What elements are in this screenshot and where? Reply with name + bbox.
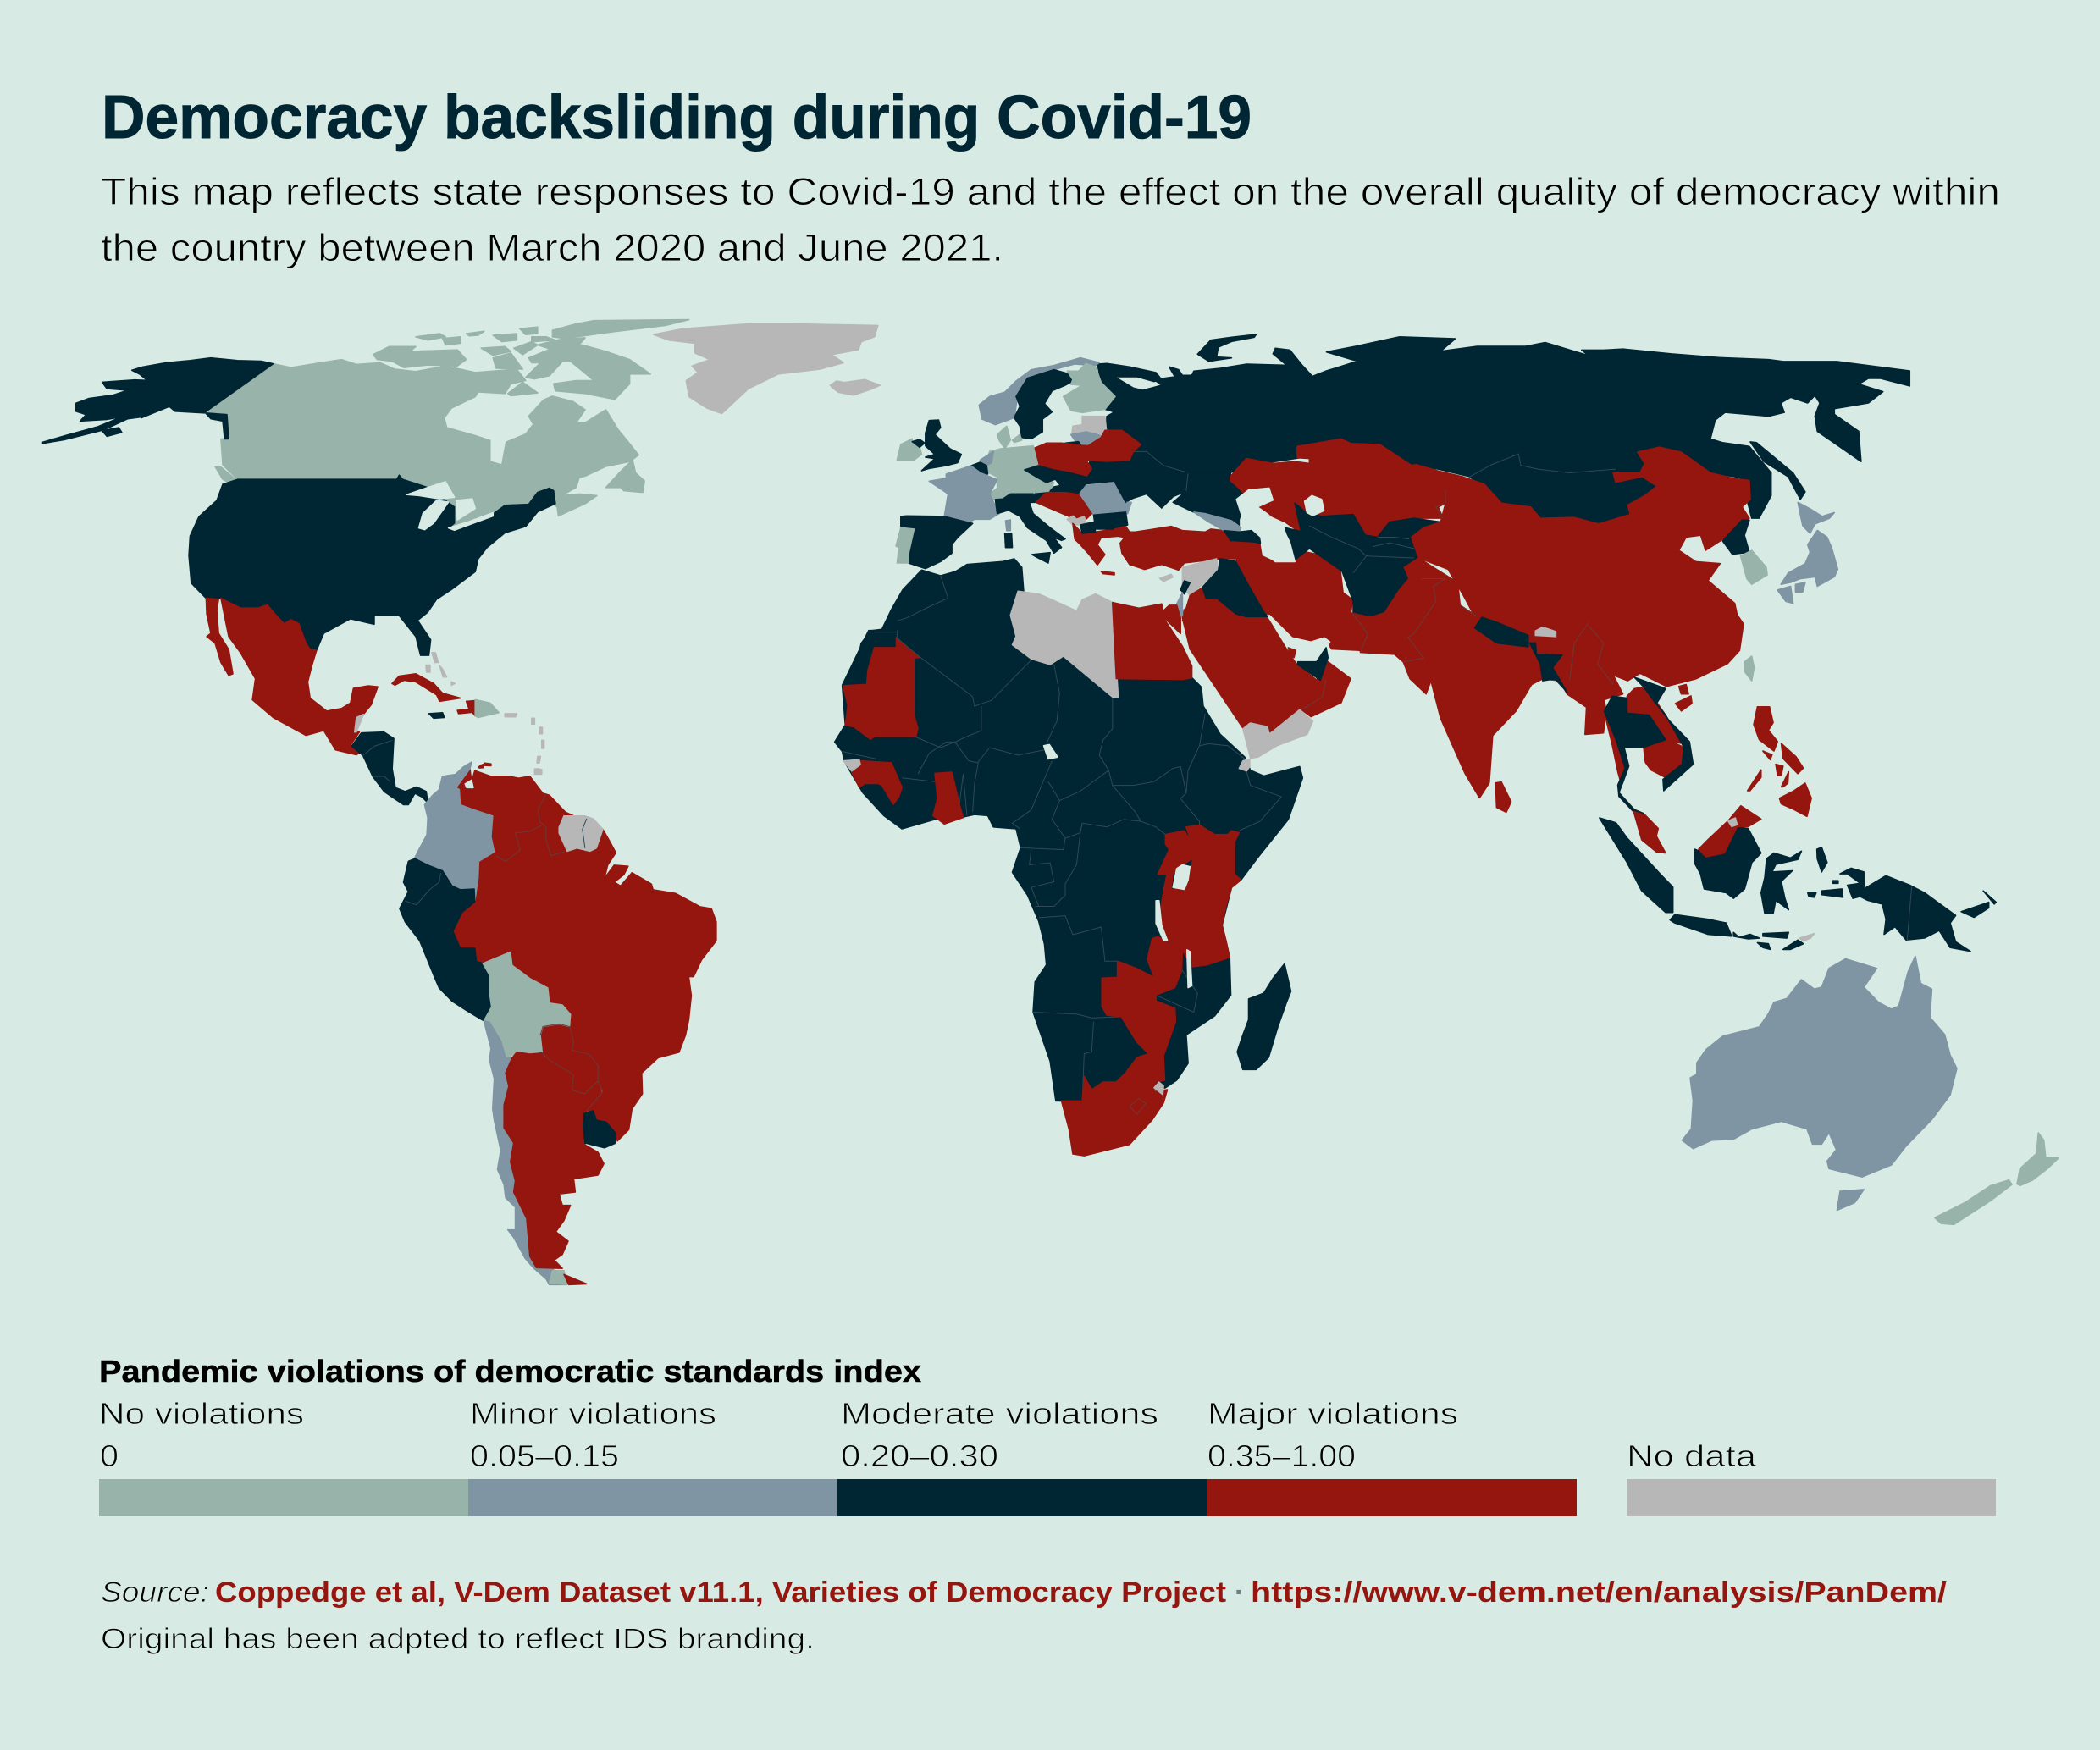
Germany, Switzerland, Austria [986, 446, 1054, 499]
Baltic: Estonia and Latvia [1072, 417, 1107, 434]
Jamaica [428, 713, 445, 718]
Guianas [559, 816, 603, 851]
African lakes [1044, 744, 1192, 987]
legend labels: No violations [99, 1396, 304, 1431]
Zimbabwe [1122, 1001, 1175, 1056]
New Britain and New Ireland [1961, 891, 1996, 917]
Borneo Malaysia [1699, 806, 1761, 857]
legend labels [99, 1396, 1757, 1473]
Qatar [1288, 648, 1296, 658]
New Guinea [1840, 868, 1970, 952]
Central Europe: Czechia, Slovakia, Hungary, Slovenia [1025, 466, 1086, 502]
Israel [1177, 593, 1182, 618]
map: Southeast Asia and Oceania [1600, 677, 2059, 1224]
Armenia and Azerbaijan [1224, 529, 1263, 548]
Central America borders [363, 741, 392, 755]
Chile [484, 1021, 566, 1284]
Africa borders [843, 631, 1281, 1101]
legend labels: Major violations [1208, 1396, 1458, 1431]
Madagascar [1237, 963, 1291, 1069]
legend heading: Pandemic violations of democratic standards index [99, 1354, 921, 1388]
Trinidad [535, 769, 539, 773]
Ecuador and Peru [400, 858, 492, 1021]
Tasmania [1838, 1190, 1864, 1210]
Malay Peninsula [1633, 811, 1666, 853]
legend labels: No data [1627, 1438, 1757, 1473]
source text: Coppedge et al, V-Dem Dataset v11.1, Varieties of Democracy Project [215, 1576, 1226, 1609]
legend labels: 0.05–0.15 [470, 1438, 619, 1473]
Iran [1231, 542, 1368, 650]
Balkans west [1036, 493, 1091, 525]
Russia west, Ukraine [1084, 362, 1397, 529]
South Korea [1741, 550, 1767, 584]
North Macedonia [1080, 522, 1096, 533]
Yemen [1243, 709, 1312, 759]
Argentina [478, 763, 604, 1284]
source text: Original has been adpted to reflect IDS branding. [101, 1623, 815, 1655]
legend labels: 0.35–1.00 [1208, 1438, 1356, 1473]
map: South America [351, 732, 716, 1284]
Great Lakes [407, 482, 493, 530]
Iceland [830, 379, 880, 395]
Bulgaria [1093, 512, 1128, 529]
Bangladesh [1529, 643, 1567, 692]
Alaska [43, 358, 274, 444]
Lebanon [1180, 581, 1190, 594]
Haiti [457, 701, 475, 716]
Libya [1010, 591, 1119, 697]
Caspian Sea [1236, 488, 1295, 561]
Moldova [1114, 481, 1130, 502]
Zambia [1102, 936, 1182, 1017]
source text: · [1235, 1576, 1244, 1609]
Venezuela, Guyana, Suriname, Brazil, Paraguay [453, 769, 716, 1141]
Taiwan [1744, 656, 1755, 681]
Mexico [206, 599, 378, 755]
Lake Maracaibo [465, 780, 473, 787]
Georgia [1194, 512, 1241, 532]
Netherlands [981, 451, 993, 466]
Aral Sea [1305, 495, 1324, 516]
Vietnam [1634, 677, 1694, 791]
New Zealand [1935, 1133, 2059, 1224]
subtitle: the country between March 2020 and June 2021. [101, 226, 1003, 269]
Caribbean islands no data [426, 653, 544, 774]
Russia east [1185, 337, 1909, 524]
Kaliningrad [1065, 442, 1080, 445]
Belgium [970, 462, 988, 474]
Scandinavia: Norway [979, 358, 1099, 425]
subtitle: This map reflects state responses to Covid-19 and the effect on the overall quality of democracy within [101, 170, 2000, 213]
Myanmar southern strip [1605, 715, 1625, 781]
subtitle [101, 170, 2000, 269]
Spain [901, 516, 973, 569]
legend labels: 0 [100, 1438, 119, 1473]
Colombia [415, 762, 495, 901]
Novaya Zemlya [1197, 334, 1256, 362]
South Asia borders [1353, 490, 1613, 685]
Kenya [1186, 825, 1241, 907]
Lesotho [1130, 1098, 1146, 1114]
legend colour bar [99, 1479, 1996, 1516]
legend labels: Moderate violations [841, 1396, 1158, 1431]
Central Asia and Afghanistan [1285, 503, 1440, 617]
Australia [1682, 956, 1957, 1177]
Ghana [933, 772, 963, 824]
Sakhalin [1750, 442, 1805, 500]
North Korea [1722, 520, 1749, 555]
Poland [1033, 443, 1091, 477]
Sweden [1014, 370, 1073, 439]
Eswatini [1154, 1082, 1163, 1095]
source text: https://www.v-dem.net/en/analysis/PanDem/ [1251, 1576, 1948, 1609]
South Asia: Pakistan, India, Myanmar [1351, 558, 1623, 798]
Ireland [897, 439, 921, 460]
Mauritania [843, 638, 920, 739]
Guinea-Bissau [843, 759, 860, 771]
Indonesia islands [1600, 818, 1843, 949]
map: Europe, Middle East and North Africa [830, 334, 1397, 739]
Japan [1777, 502, 1838, 604]
United States [189, 475, 555, 655]
Hainan and Hong Kong [1676, 685, 1692, 711]
Corsica [1005, 520, 1010, 531]
France [929, 466, 999, 523]
South Africa [1062, 1054, 1168, 1156]
Egypt [1113, 603, 1192, 680]
Greenland [654, 324, 878, 414]
Central Asia borders [1309, 454, 1616, 573]
Europe borders [870, 451, 1368, 709]
Laos [1627, 687, 1682, 743]
China [1412, 447, 1750, 687]
Lithuania [1071, 432, 1103, 447]
Syria [1182, 559, 1219, 595]
Maghreb [850, 559, 1113, 700]
Sri Lanka [1495, 782, 1511, 812]
Nepal [1475, 617, 1528, 647]
Belarus [1086, 430, 1141, 461]
Romania [1079, 483, 1131, 515]
Turkey [1114, 527, 1235, 570]
Guinea [852, 761, 902, 804]
Uruguay [583, 1111, 616, 1148]
Brunei [1728, 818, 1738, 826]
map: Africa base [835, 631, 1302, 1103]
source text [101, 1576, 1948, 1655]
legend labels: 0.20–0.30 [841, 1438, 998, 1473]
map: North America [43, 320, 878, 774]
Kazakhstan [1230, 439, 1462, 537]
legend [99, 1354, 1996, 1516]
UK [921, 420, 961, 471]
map: Africa countries [843, 631, 1312, 1156]
Uganda [1158, 831, 1194, 875]
Gulf [1269, 616, 1329, 662]
Italy [995, 494, 1065, 563]
Tanzania [1160, 872, 1230, 967]
Northern Ireland [912, 439, 925, 447]
Djibouti [1239, 759, 1250, 771]
UAE [1298, 648, 1328, 680]
Tierra del Fuego green [550, 1271, 567, 1284]
Canada [205, 320, 689, 528]
Bhutan [1535, 627, 1556, 637]
title: Democracy backsliding during Covid-19 [102, 84, 1252, 152]
Jordan [1182, 588, 1205, 621]
country borders [405, 793, 603, 1111]
Cyprus [1160, 574, 1173, 582]
Thailand [1605, 696, 1666, 814]
legend labels: Minor violations [470, 1396, 716, 1431]
Central America [351, 732, 428, 804]
Bolivia [483, 952, 571, 1058]
Iraq [1202, 559, 1268, 618]
Philippines [1748, 707, 1811, 816]
Arabian Peninsula [1182, 599, 1351, 734]
Dominican Republic [475, 699, 499, 718]
Borneo Indonesia [1694, 826, 1761, 898]
Belize [355, 715, 363, 732]
Denmark [998, 426, 1022, 449]
Cambodia [1644, 740, 1684, 777]
Cuba [392, 674, 461, 701]
Albania and Greece [1073, 523, 1119, 575]
Timor-Leste [1799, 934, 1815, 941]
source text: Source: [101, 1576, 209, 1609]
map: Asia [1185, 337, 1909, 812]
Montenegro Kosovo [1067, 516, 1086, 525]
PNG border [1907, 887, 1912, 940]
Portugal [896, 527, 914, 563]
Finland [1064, 363, 1115, 412]
